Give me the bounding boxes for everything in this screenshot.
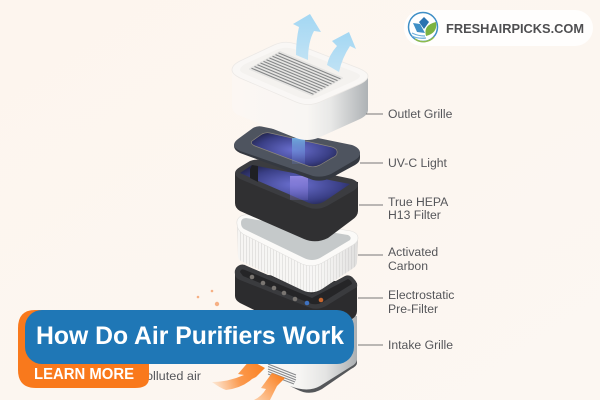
grille vents bbox=[250, 52, 342, 95]
button: learn more bbox=[18, 310, 149, 388]
filter: UV-C light plate bbox=[234, 126, 360, 181]
intake vents bbox=[268, 364, 296, 384]
logo badge: FRESHAIRPICKS.COM bbox=[446, 21, 584, 36]
particles bbox=[197, 290, 219, 306]
intake grille unit bbox=[243, 316, 357, 393]
polluted air label: olluted air bbox=[146, 369, 201, 383]
icon: clean air arrows bbox=[293, 14, 356, 72]
labels and leader lines: H13 Filter bbox=[388, 208, 441, 222]
filter: True HEPA H13 bbox=[235, 160, 358, 241]
labels and leader lines: Outlet Grille bbox=[388, 107, 453, 121]
labels and leader lines: Carbon bbox=[388, 259, 428, 273]
labels and leader lines: True HEPA bbox=[388, 195, 449, 209]
icon: lotus leaf logo bbox=[408, 12, 438, 42]
filter: electrostatic pre-filter bbox=[235, 264, 357, 337]
labels and leader lines: Pre-Filter bbox=[388, 302, 438, 316]
labels and leader lines: Intake Grille bbox=[388, 338, 453, 352]
button: learn more: LEARN MORE bbox=[34, 366, 134, 383]
filter: activated carbon bbox=[237, 215, 358, 292]
labels and leader lines bbox=[358, 107, 454, 352]
icon: polluted air arrows bbox=[212, 360, 285, 400]
title banner: How Do Air Purifiers Work bbox=[36, 322, 344, 350]
labels and leader lines: Electrostatic bbox=[388, 288, 454, 302]
labels and leader lines: Activated bbox=[388, 245, 438, 259]
logo badge bbox=[404, 10, 593, 46]
title banner bbox=[25, 310, 354, 364]
outlet grille unit bbox=[232, 42, 368, 140]
labels and leader lines: UV-C Light bbox=[388, 156, 448, 170]
indicator dots bbox=[250, 275, 323, 305]
